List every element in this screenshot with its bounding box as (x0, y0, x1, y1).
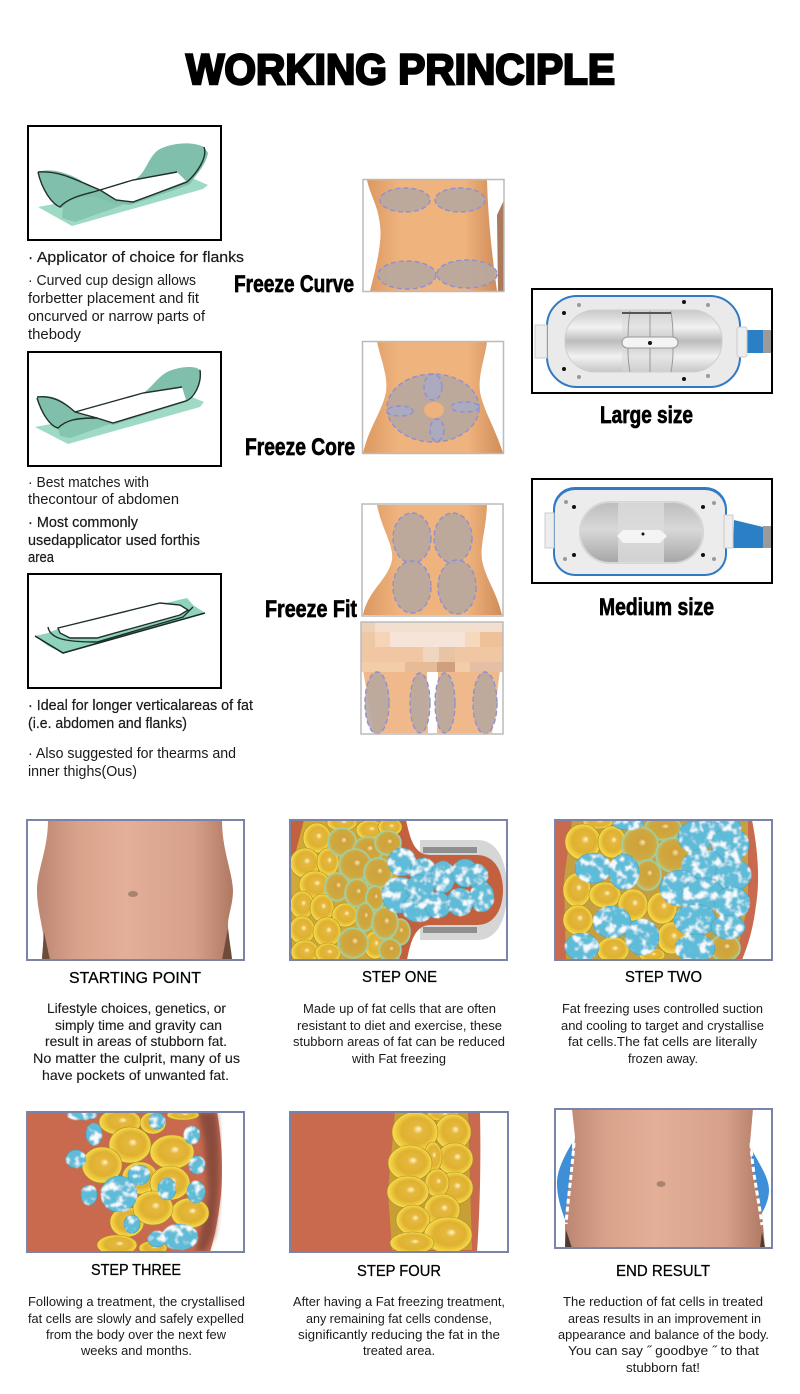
title: WORKING PRINCIPLE (186, 46, 615, 94)
panel: starting point image (27, 820, 244, 960)
text: step three: Following a treatment, the crystallised (28, 1294, 245, 1309)
text: step two: and cooling to target and crystallise (561, 1018, 764, 1033)
text: starting point (33, 1000, 240, 1083)
photo: back with treatment zones (363, 179, 504, 292)
heading: step two: STEP TWO (625, 969, 702, 986)
text: starting point: Lifestyle choices, genetics, or (47, 1000, 226, 1016)
text: step two: fat cells.The fat cells are literally (568, 1034, 758, 1049)
freeze curve applicator description: · Curved cup design allows (28, 273, 196, 289)
text: starting point: No matter the culprit, many of us (33, 1050, 240, 1066)
frame (28, 574, 221, 688)
text: step four: treated area. (363, 1343, 435, 1358)
freeze curve applicator description: · Applicator of choice for flanks (28, 250, 244, 266)
frame (28, 352, 221, 466)
photo: thighs with pixelated top (361, 622, 503, 734)
heading: end result: END RESULT (616, 1263, 710, 1280)
heading: step three: STEP THREE (91, 1262, 181, 1279)
text: end result (558, 1294, 769, 1375)
freeze core applicator description: thecontour of abdomen (28, 492, 179, 508)
text: step four: After having a Fat freezing treatment, (293, 1294, 505, 1309)
text: step two: Fat freezing uses controlled suction (562, 1001, 763, 1016)
label: medium size: Medium size (599, 594, 714, 621)
freeze core applicator description: usedapplicator used forthis (28, 533, 200, 549)
text: step one: stubborn areas of fat can be reduced (293, 1034, 505, 1049)
label: freeze curve: Freeze Curve (234, 271, 354, 298)
freeze curve applicator description: thebody (28, 327, 82, 343)
freeze fit applicator description (28, 698, 253, 780)
text: step one: resistant to diet and exercise, these (297, 1018, 502, 1033)
text: step one (293, 1001, 505, 1066)
text: step one: with Fat freezing (351, 1051, 446, 1066)
text: end result: stubborn fat! (626, 1360, 700, 1375)
text: step four: any remaining fat cells condense, (306, 1311, 492, 1326)
frame (28, 126, 221, 240)
label: freeze core: Freeze Core (245, 434, 355, 461)
panel: medium size applicator (532, 479, 772, 583)
freeze curve applicator description (28, 250, 244, 343)
freeze core applicator description (28, 475, 200, 566)
freeze fit applicator description: (i.e. abdomen and flanks) (28, 716, 187, 732)
freeze curve applicator description: oncurved or narrow parts of (28, 309, 206, 325)
freeze core applicator description: area (28, 550, 55, 566)
text: starting point: result in areas of stubborn fat. (45, 1033, 227, 1049)
freeze fit applicator description: · Also suggested for thearms and (28, 746, 236, 762)
freeze curve applicator description: forbetter placement and fit (28, 291, 199, 307)
text: starting point: simply time and gravity can (55, 1017, 222, 1033)
freeze core applicator description: · Most commonly (28, 515, 139, 531)
panel: large size applicator (532, 289, 772, 393)
panel: end result image (555, 1109, 772, 1248)
text: end result: areas results in an improvement in (568, 1311, 761, 1326)
panel: freeze curve applicator image (28, 126, 221, 240)
heading: step one: STEP ONE (362, 969, 437, 986)
frame (532, 479, 772, 583)
text: step four (293, 1294, 505, 1358)
panel: freeze core applicator image (28, 352, 221, 466)
text: step two (561, 1001, 764, 1066)
text: end result: The reduction of fat cells in treated (563, 1294, 763, 1309)
panel: freeze fit applicator image (28, 574, 221, 688)
panel: step four image (290, 1109, 508, 1254)
frame (532, 289, 772, 393)
photo: abdomen four zones (362, 504, 504, 616)
heading: step four: STEP FOUR (357, 1263, 441, 1280)
text: end result: appearance and balance of the body. (558, 1327, 769, 1342)
label: large size: Large size (600, 402, 693, 429)
text: step three (28, 1294, 245, 1358)
panel: step two image (555, 815, 772, 963)
freeze fit applicator description: · Ideal for longer verticalareas of fat (28, 698, 253, 714)
text: step four: significantly reducing the fat in the (298, 1327, 500, 1342)
panel: step one image (289, 815, 507, 964)
text: step one: Made up of fat cells that are often (303, 1001, 496, 1016)
freeze core applicator description: · Best matches with (28, 475, 149, 491)
freeze fit applicator description: inner thighs(Ous) (28, 764, 137, 780)
text: step three: weeks and months. (80, 1343, 192, 1358)
text: step three: from the body over the next few (46, 1327, 227, 1342)
panel: step three image (27, 1109, 244, 1255)
text: step two: frozen away. (628, 1051, 698, 1066)
text: step three: fat cells are slowly and safely expelled (28, 1311, 244, 1326)
heading: starting point: STARTING POINT (69, 970, 201, 987)
photo: abdomen with treatment zones (362, 341, 504, 454)
label: freeze fit: Freeze Fit (265, 596, 357, 623)
text: end result: You can say ˝ goodbye ˝ to that (568, 1343, 759, 1358)
text: starting point: have pockets of unwanted fat. (42, 1067, 229, 1083)
